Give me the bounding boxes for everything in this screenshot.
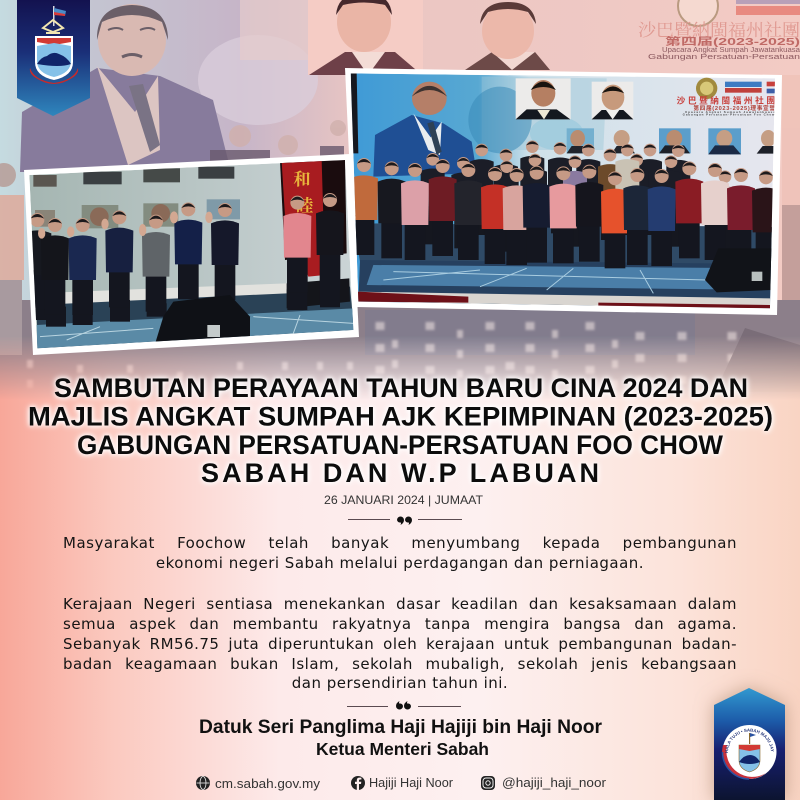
body paragraph 2: Sebanyak RM56.75 juta diperuntukan oleh kerajaan untuk pembangunan badan- [63,634,737,652]
body paragraph 1 [63,534,737,572]
body paragraph 1: ekonomi negeri Sabah melalui perdagangan dan perniagaan. [156,554,644,572]
flag [53,6,66,26]
photo chief minister portrait [373,82,477,177]
photo backdrop portraits [516,78,776,154]
title: SAMBUTAN PERAYAAN TAHUN BARU CINA 2024 DAN [54,373,748,403]
faded backdrop emblem and text: 第四届(2023-2025) [665,35,800,48]
title: GABUNGAN PERSATUAN-PERSATUAN FOO CHOW [77,430,723,460]
stage floor [35,278,354,348]
backdrop portraits [33,167,240,228]
speaker role: Ketua Menteri Sabah [316,739,489,759]
photo stage steps behind legs [354,223,773,265]
faded backdrop emblem and text: Gabungan Persatuan-Persatuan [648,54,800,61]
body paragraph 2: Kerajaan Negeri sentiasa menekankan dasar keadilan dan kesaksamaan dalam [63,595,737,613]
photo front row people [350,158,780,268]
photo speaker [705,248,772,292]
title: SABAH DAN W.P LABUAN [201,458,599,488]
footer: facebook: Hajiji Haji Noor [369,776,453,790]
photo backdrop [29,160,353,348]
photo backdrop [351,73,775,308]
faded backdrop emblem and text: Upacara Angkat Sumpah Jawatankuasa [662,47,800,54]
footer: instagram: @hajiji_haji_noor [502,776,606,790]
faded swirl [198,35,318,125]
banner: Sabah crest [17,0,90,116]
photo stage floor [357,260,772,308]
title: MAJLIS ANGKAT SUMPAH AJK KEPIMPINAN (2023-2025) [28,402,773,432]
speaker [155,295,250,344]
faded stage band [0,280,800,400]
body paragraph 2: dan persendirian tahun ini. [292,674,508,692]
oath people [23,193,344,327]
body paragraph 2 [63,595,737,692]
photo: oath taking on stage [23,154,359,355]
faded portrait [20,4,231,172]
icon: facebook [351,776,365,790]
logo roundel: HALA TUJU • SABAH MAJU JAYA [724,728,774,753]
title [28,373,773,488]
icon: instagram [481,776,495,790]
photo backdrop emblem and text [677,78,775,117]
faded crowd [0,75,800,300]
icon: globe [196,776,210,790]
photo backdrop emblem and text: Gabungan Persatuan-Persatuan Foo Chow [683,113,775,117]
body paragraph 1: Masyarakat Foochow telah banyak menyumbang kepada pembangunan [63,534,737,552]
photo back row people [421,140,737,262]
speaker name: Datuk Seri Panglima Haji Hajiji bin Haji Noor [199,717,603,738]
body paragraph 2: badan keagamaan bukan Islam, sekolah mubaligh, sekolah jenis kebangsaan [63,654,737,672]
crest ornament [43,20,63,33]
faded backdrop emblem and text [638,0,800,61]
faded upper portraits [308,0,550,75]
photo: oath taking on stage: 睦 [296,192,314,217]
date: 26 JANUARI 2024 | JUMAAT [324,493,484,507]
divider: closing quote [347,701,461,710]
photo backdrop emblem and text: 第四届(2023-2025)理事宣誓 [693,104,775,112]
footer: website: cm.sabah.gov.my [215,776,321,791]
photo backdrop emblem and text: Upacara Angkat Sumpah Jawatankuasa [685,110,775,114]
photo: group portrait on stage [345,68,782,315]
photo backdrop emblem and text: 沙巴暨納閩福州社團 [677,94,775,105]
faded backdrop emblem and text: 沙巴暨納閩福州社團 [638,16,800,41]
photo: oath taking on stage: 和 [293,165,311,190]
body paragraph 2: semua aspek dan membantu rakyatnya tanpa mengira bangsa dan agama. [63,615,737,633]
divider: opening quote [348,517,462,525]
shield [30,36,78,84]
